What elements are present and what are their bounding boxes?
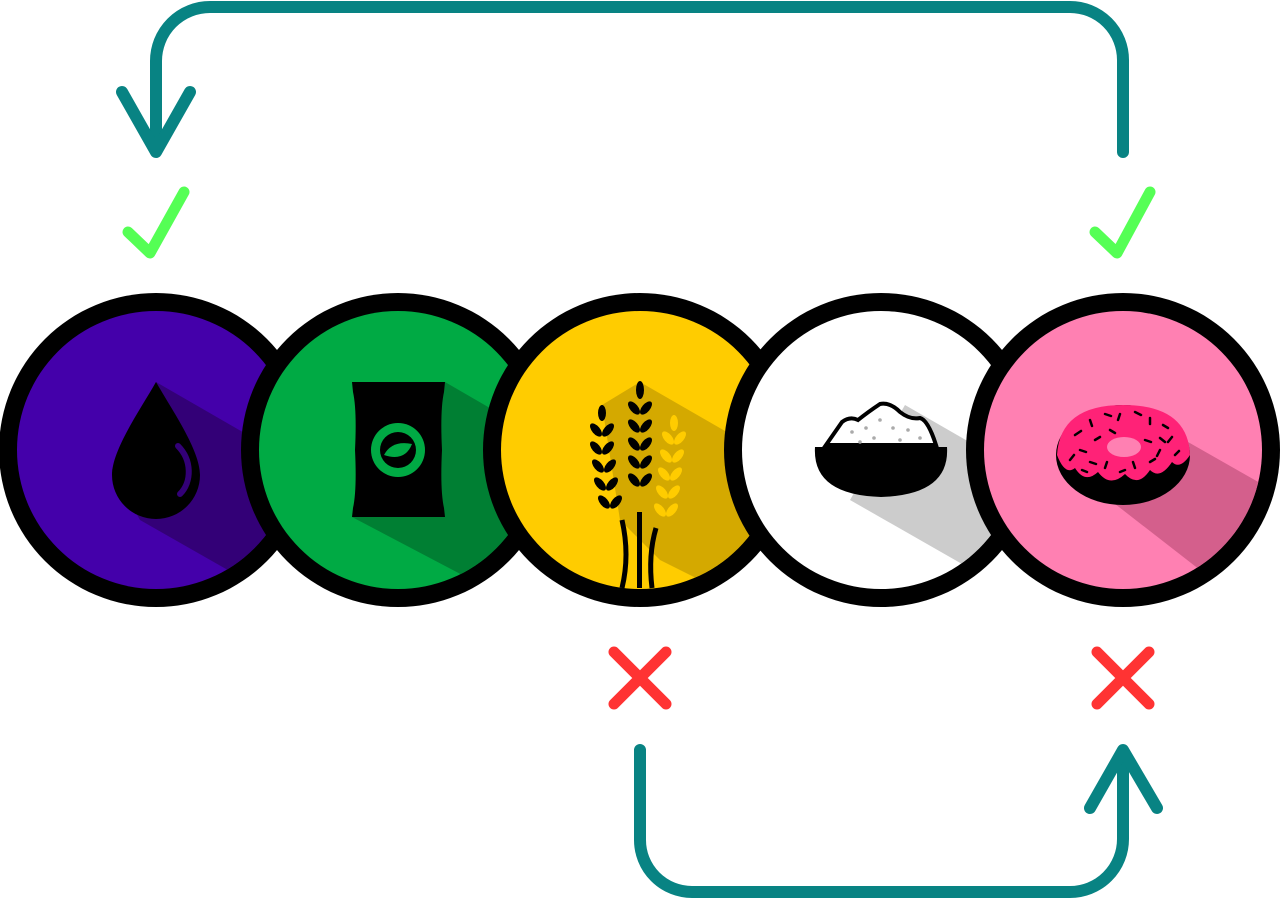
cross mark wheat xyxy=(614,652,666,704)
icon: drop xyxy=(112,382,200,519)
check mark left xyxy=(128,192,184,253)
circle: donut xyxy=(966,293,1280,640)
arrow: top loop xyxy=(122,7,1123,152)
circle: flour bowl xyxy=(724,293,1002,607)
icon: wheat stalks xyxy=(588,381,654,588)
circle: wheat xyxy=(483,293,760,607)
circle: water drop xyxy=(0,293,277,607)
icon: donut xyxy=(1056,405,1190,505)
check mark right xyxy=(1095,192,1150,253)
cross mark donut xyxy=(1097,652,1149,704)
circle: seed bag xyxy=(241,293,519,607)
icon: bag xyxy=(352,382,445,517)
arrow: bottom loop xyxy=(640,750,1157,892)
icon: bowl xyxy=(826,404,936,445)
